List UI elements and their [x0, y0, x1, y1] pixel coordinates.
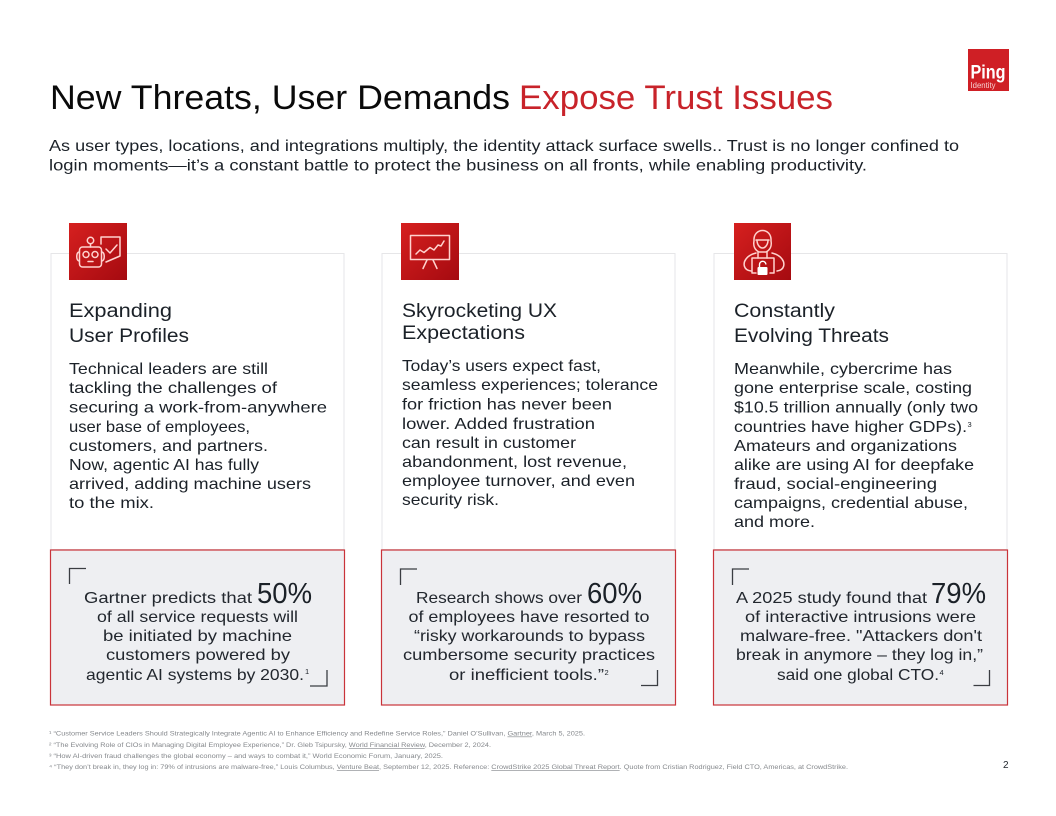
- callout: Gartner 50%: 1: [305, 667, 309, 676]
- body text: $10.5 trillion annually (only two: [734, 400, 978, 416]
- callout: study 79%: malware-free. "Attackers don't: [740, 628, 983, 645]
- title: [50, 79, 833, 117]
- body text: arrived, adding machine users: [69, 476, 311, 493]
- subtitle: As user types, locations, and integrations multiply, the identity attack surface swells.. Trust is no longer confined to: [49, 138, 959, 155]
- body text: countries have higher GDPs).: [734, 419, 967, 436]
- body text: securing a work-from-anywhere: [69, 400, 327, 416]
- body text: 3: [968, 420, 972, 429]
- logo: Ping Identity: Ping: [970, 62, 1006, 84]
- icon: robot and shield: [69, 223, 127, 280]
- footnotes: ⁴ “They don’t break in, they log in: 79% of intrusions are malware-free,” Louis Columbus, Venture Beat , September 12, 2025. Reference: CrowdStrike 2025 Global Threat Report . Quote from Cristian Rodriguez, Field CTO, Americas, at CrowdStrike.: [49, 764, 848, 771]
- footnotes: ² “The Evolving Role of CIOs in Managing Digital Employee Experience,” Dr. Gleb Tsipursky, World Financial Review , December 2, 2024.: [49, 742, 491, 749]
- callout: study 79%: break in anymore – they log in,”: [736, 647, 983, 664]
- body text: alike are using AI for deepfake: [734, 457, 974, 474]
- body text: to the mix.: [69, 495, 154, 512]
- body text: security risk.: [402, 492, 499, 509]
- footnotes: ¹ “Customer Service Leaders Should Strategically Integrate Agentic AI to Enhance Efficiency and Redefine Service Roles,” Daniel O’Sullivan, Gartner , March 5, 2025.: [49, 730, 585, 738]
- body text: abandonment, lost revenue,: [402, 454, 627, 471]
- logo: Ping Identity: Identity: [970, 81, 996, 90]
- body text: customers, and partners.: [69, 438, 268, 455]
- body text: and more.: [734, 514, 815, 531]
- body text: for friction has never been: [402, 396, 612, 414]
- heading: [734, 301, 889, 347]
- title: Expose Trust Issues: [519, 79, 833, 117]
- heading: User Profiles: [69, 326, 189, 347]
- panel: skyrocketing UX expectations: [382, 223, 675, 550]
- body text: can result in customer: [402, 435, 577, 452]
- heading: Expanding: [69, 301, 172, 322]
- callout: Gartner 50%: Gartner predicts that: [84, 590, 253, 607]
- callout: study 79%: 4: [940, 668, 944, 677]
- body text: user base of employees,: [69, 419, 250, 436]
- panel: expanding user profiles: [51, 223, 344, 550]
- heading: Skyrocketing UX: [402, 301, 557, 322]
- heading: Evolving Threats: [734, 326, 889, 347]
- icon: hooded hacker with lock: [734, 223, 791, 280]
- body text: lower. Added frustration: [402, 416, 595, 433]
- subtitle: login moments—it’s a constant battle to protect the business on all fronts, while enabling productivity.: [49, 158, 867, 174]
- body text: employee turnover, and even: [402, 473, 635, 490]
- callout: research 60%: cumbersome security practices: [403, 647, 655, 664]
- callout: Gartner 50%: of all service requests will: [97, 609, 298, 626]
- callout: research 60%: of employees have resorted to: [408, 609, 650, 626]
- callout: Gartner 50%: customers powered by: [106, 647, 290, 664]
- page number: 2: [1003, 760, 1009, 771]
- callout: Gartner 50%: agentic AI systems by 2030.: [86, 667, 304, 684]
- callout: Gartner 50%: 50%: [257, 578, 312, 610]
- callout: study 79%: 79%: [931, 578, 986, 610]
- body text: fraud, social-engineering: [734, 476, 937, 493]
- callout: Gartner 50%: be initiated by machine: [103, 628, 292, 645]
- callout: research 60%: “risky workarounds to bypass: [414, 628, 645, 645]
- body text: [402, 358, 658, 509]
- body text: Amateurs and organizations: [734, 438, 957, 455]
- callout: research 60%: Research shows over: [416, 590, 583, 607]
- heading: Constantly: [734, 301, 836, 322]
- heading: [69, 301, 189, 347]
- callout: research 60%: [382, 550, 676, 705]
- body text: Meanwhile, cybercrime has: [734, 361, 952, 378]
- body text: campaigns, credential abuse,: [734, 495, 968, 512]
- footnotes: ³ “How AI-driven fraud challenges the global economy – and ways to combat it,” World Economic Forum, January, 2025.: [49, 753, 443, 760]
- title: New Threats, User Demands: [50, 79, 510, 117]
- panel: constantly evolving threats: [714, 223, 1007, 550]
- callout: study 79%: A 2025 study found that: [736, 590, 928, 607]
- callout: research 60%: or inefficient tools.”: [449, 667, 604, 684]
- callout: study 79%: [714, 550, 1008, 705]
- callout: study 79%: of interactive intrusions were: [745, 609, 976, 626]
- callout: study 79%: said one global CTO.: [777, 667, 939, 684]
- logo: Ping Identity: [968, 49, 1009, 91]
- body text: gone enterprise scale, costing: [734, 380, 972, 397]
- callout: research 60%: 2: [604, 668, 609, 677]
- footnotes: [49, 730, 848, 771]
- body text: tackling the challenges of: [69, 380, 278, 397]
- body text: [69, 361, 327, 512]
- icon: presentation chart: [401, 223, 459, 280]
- subtitle: [49, 138, 959, 174]
- callout: Gartner 50%: [50, 550, 344, 705]
- callout: research 60%: 60%: [587, 578, 642, 610]
- body text: [734, 361, 978, 531]
- heading: [402, 301, 557, 344]
- heading: Expectations: [402, 323, 525, 344]
- body text: Today’s users expect fast,: [402, 358, 601, 375]
- body text: seamless experiences; tolerance: [402, 377, 658, 394]
- body text: Now, agentic AI has fully: [69, 457, 259, 474]
- body text: Technical leaders are still: [69, 361, 268, 378]
